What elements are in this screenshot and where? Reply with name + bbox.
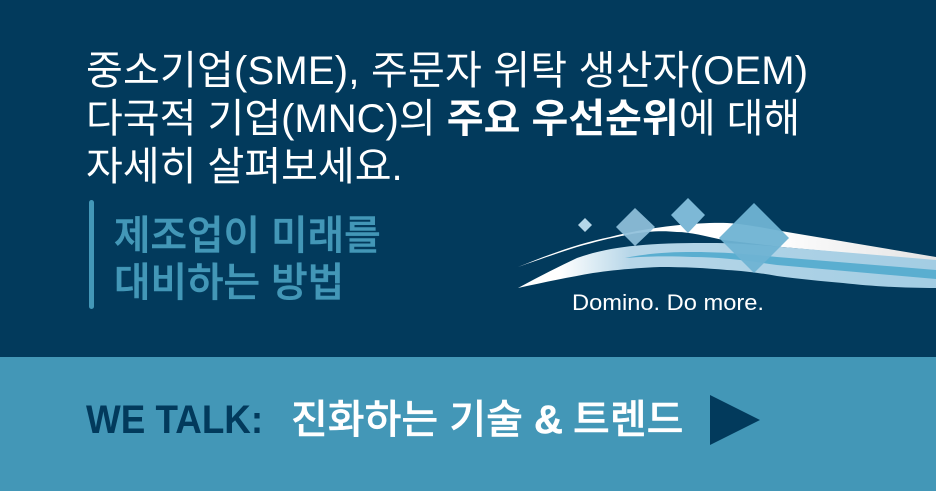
logo: Domino swoosh and diamonds <box>518 198 936 315</box>
icon: tiny diamond <box>578 218 592 232</box>
icon: medium diamond <box>671 198 705 233</box>
heading: 중소기업(SME), 주문자 위탁 생산자(OEM) <box>86 49 808 93</box>
blue swoosh <box>518 243 936 288</box>
white swoosh <box>518 223 936 267</box>
blue swoosh middle band <box>625 252 936 279</box>
arrow <box>710 395 760 445</box>
subheading <box>114 204 381 308</box>
heading: 다국적 기업(MNC)의 주요 우선순위에 대해 <box>86 97 800 141</box>
WE TALK label: WE TALK: <box>86 398 263 442</box>
accent bar <box>89 200 94 309</box>
heading: 자세히 살펴보세요. <box>86 145 403 189</box>
heading <box>86 49 808 189</box>
logo tagline: Domino. Do more. <box>572 290 764 315</box>
bottom band <box>0 357 936 491</box>
icon: large diamond <box>719 203 789 273</box>
subheading: 대비하는 방법 <box>114 251 344 308</box>
subheading: 제조업이 미래를 <box>114 204 381 261</box>
band text: 진화하는 기술 & 트렌드 <box>291 398 683 442</box>
icon: small diamond <box>616 208 655 246</box>
